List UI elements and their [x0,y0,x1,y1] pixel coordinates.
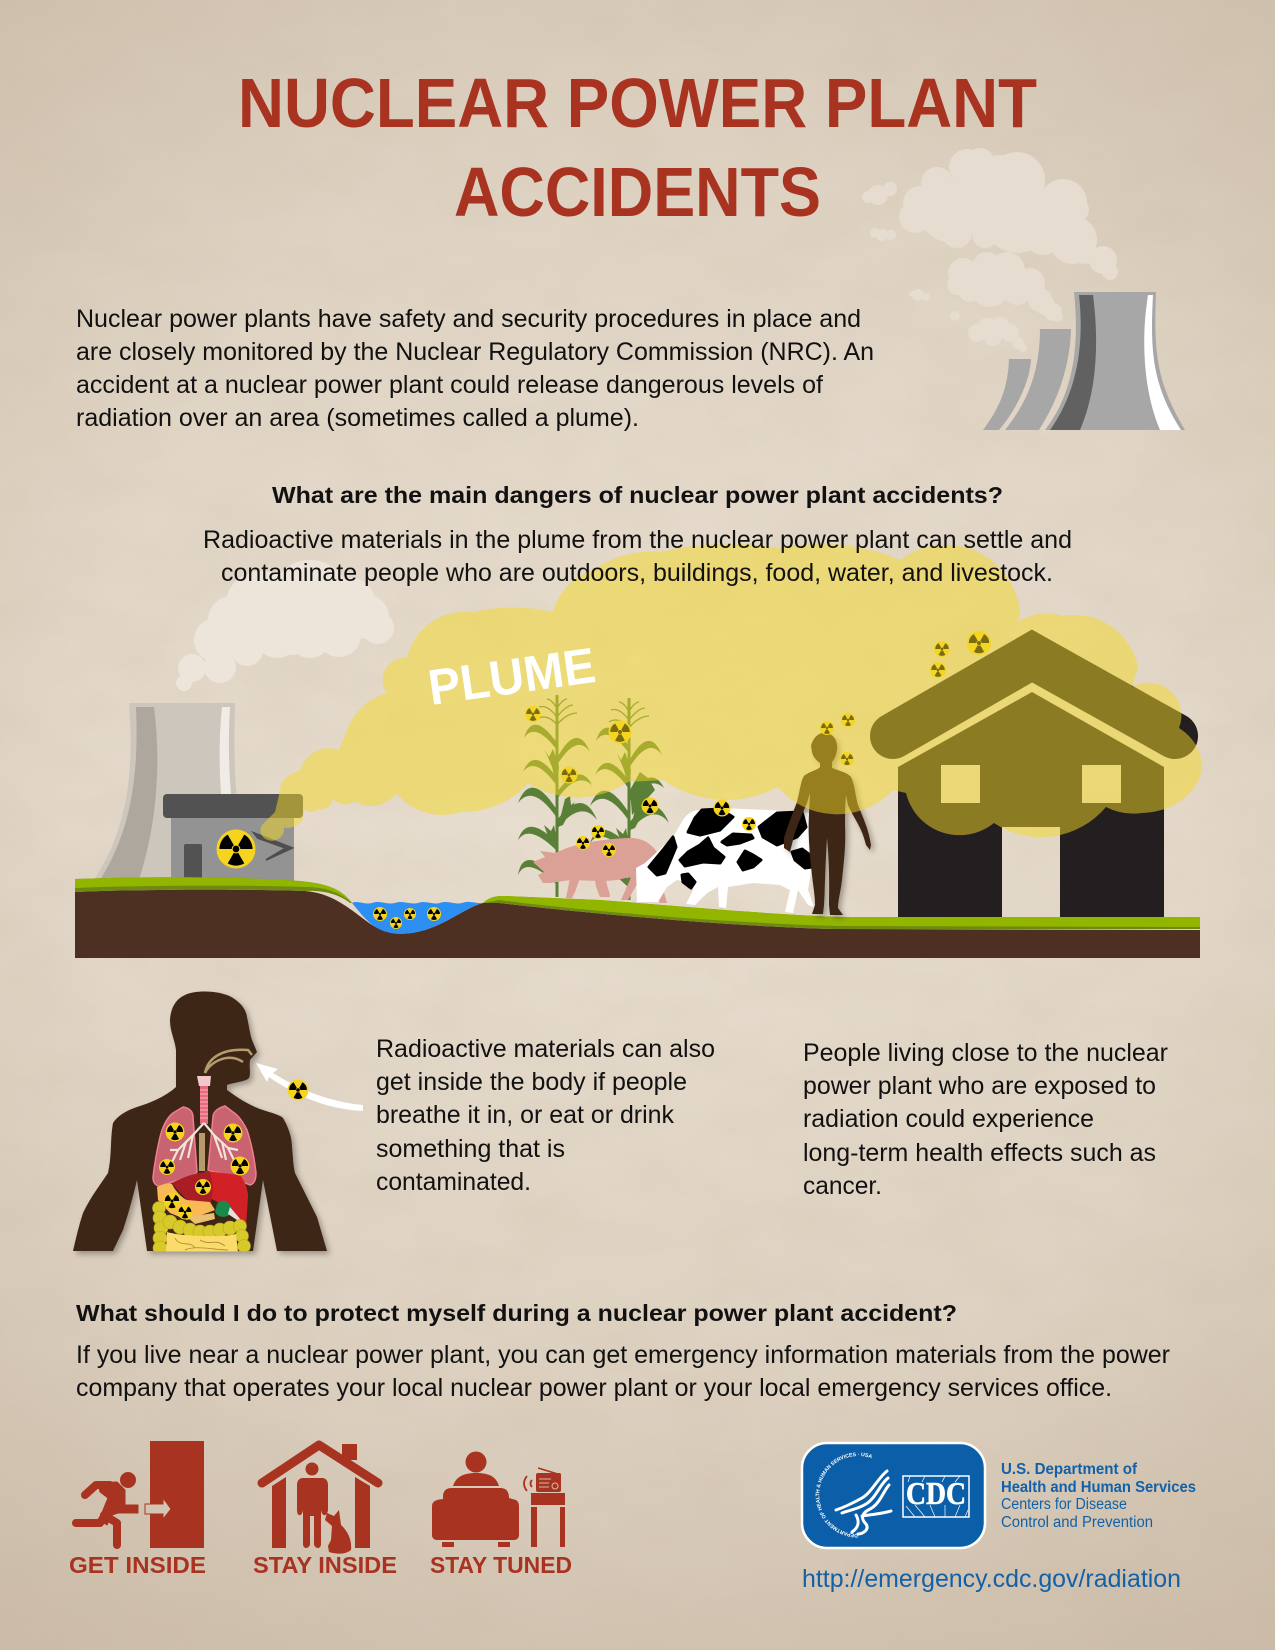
ground and grass [75,877,1200,958]
airway [197,1050,252,1171]
icon: stay inside [262,1444,378,1554]
dangers text [203,526,1072,587]
bronchi [170,1123,238,1162]
text: inhalation [376,1035,715,1196]
HHS CDC logo [800,1442,986,1550]
protection text: If you live near a nuclear power plant, you can get emergency information materials from the power [76,1341,1170,1369]
HHS CDC wordmark: U.S. Department of [1001,1461,1138,1478]
scene: plume diagram [75,544,1202,958]
text: inhalation: contaminated. [376,1168,531,1196]
icon: stay tuned [432,1452,565,1547]
intro text: accident at a nuclear power plant could release dangerous levels of [76,371,823,399]
intestines [152,1202,250,1255]
CDC box: CDC [906,1475,966,1511]
label: stay tuned: STAY TUNED [430,1552,572,1578]
text: long-term effects [803,1039,1168,1200]
dangers text: contaminate people who are outdoors, buildings, food, water, and livestock. [221,559,1053,587]
section heading: protection: What should I do to protect myself during a nuclear power plant accident? [76,1300,957,1326]
HHS CDC wordmark: Health and Human Services [1001,1479,1196,1496]
intro text: Nuclear power plants have safety and security procedures in place and [76,305,861,333]
text: inhalation: breathe it in, or eat or drink [376,1101,674,1129]
title: NUCLEAR POWER PLANT [238,64,1037,142]
intro text: radiation over an area (sometimes called a plume). [76,404,639,432]
HHS seal: DEPARTMENT OF HEALTH & HUMAN SERVICES · USA [816,1452,872,1538]
text: long-term effects: power plant who are exposed to [803,1072,1156,1100]
section heading: dangers: What are the main dangers of nuclear power plant accidents? [272,482,1003,508]
arrow with radiation particle [256,1063,363,1111]
text: long-term effects: cancer. [803,1172,882,1200]
left cooling tower [94,703,245,882]
text: inhalation: get inside the body if people [376,1068,687,1096]
smoke clouds above right towers [862,148,1118,352]
radiation symbols in body [159,1122,250,1220]
dangers text: Radioactive materials in the plume from the nuclear power plant can settle and [203,526,1072,554]
person [784,733,871,915]
text: long-term effects: radiation could experience [803,1105,1094,1133]
radiation symbols beneath plume [525,631,991,784]
text: long-term effects: long-term health effects such as [803,1139,1156,1167]
text: inhalation: Radioactive materials can also [376,1035,715,1063]
intro text [76,305,874,432]
radiation symbols on animals [576,798,756,857]
corn plants [518,695,669,900]
cow [636,808,814,913]
yellow plume cloud [260,544,1202,841]
text: inhalation: something that is [376,1135,565,1163]
body silhouette [73,992,327,1251]
HHS CDC wordmark: Control and Prevention [1001,1514,1153,1531]
reactor building [163,794,303,885]
HHS CDC wordmark [1001,1461,1196,1531]
human body with organs [73,992,327,1255]
label: get inside: GET INSIDE [69,1552,206,1578]
PLUME label: PLUME [425,637,599,716]
house [893,656,1175,917]
URL: http://emergency.cdc.gov/radiation [802,1565,1181,1593]
icon: get inside [76,1441,204,1548]
icon: cooling towers top right [983,292,1185,430]
text: long-term effects: People living close to the nuclear [803,1039,1168,1067]
protection text [76,1341,1170,1402]
title [238,64,1037,231]
lungs [153,1106,256,1186]
water [352,902,483,934]
label: stay inside: STAY INSIDE [253,1552,397,1578]
intro text: are closely monitored by the Nuclear Regulatory Commission (NRC). An [76,338,874,366]
HHS CDC wordmark: Centers for Disease [1001,1496,1127,1513]
title: ACCIDENTS [454,153,821,231]
abdominal organs [157,1171,248,1227]
pig [533,838,667,903]
protection text: company that operates your local nuclear power plant or your local emergency services office. [76,1374,1112,1402]
white smoke above left tower [176,560,394,691]
